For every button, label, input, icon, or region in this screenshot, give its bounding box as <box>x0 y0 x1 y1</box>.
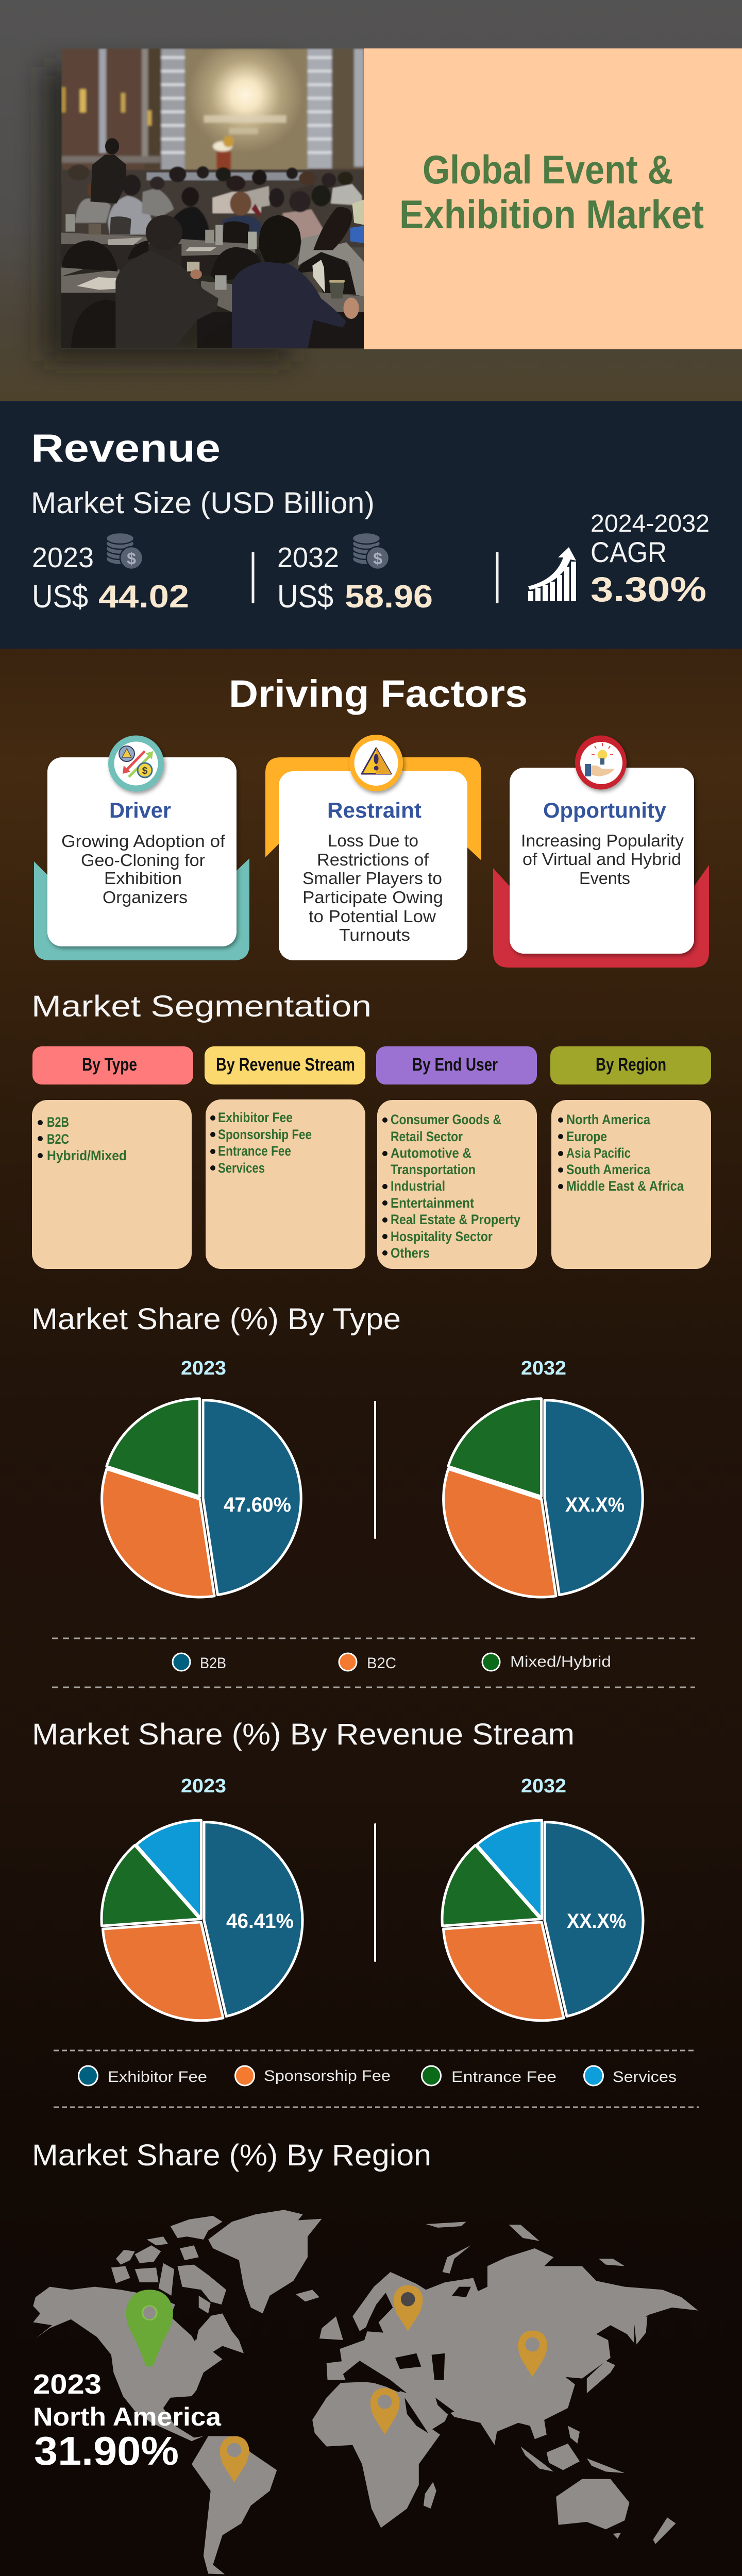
list: region: Asia Pacific <box>566 1145 631 1161</box>
divider <box>251 552 255 603</box>
stat: 2023 revenue <box>32 541 189 615</box>
card title: Restraint <box>327 798 421 822</box>
list: end user: Real Estate & Property <box>391 1212 520 1227</box>
stat: cagr: 3.30% <box>591 570 706 609</box>
heading: driving factors: Driving Factors <box>229 672 528 715</box>
title: Exhibition Market <box>399 192 704 237</box>
list: end user: Industrial <box>391 1178 445 1194</box>
pie chart: revenue stream 2032 <box>442 1820 643 2021</box>
pie label 2032: XX.X% <box>567 1910 626 1933</box>
stat: 2032 revenue <box>277 541 433 615</box>
pie label 2023: 46.41% <box>226 1910 294 1933</box>
card text: of Virtual and Hybrid <box>522 850 681 869</box>
legend: type: Mixed/Hybrid <box>510 1653 611 1670</box>
heading: market share by revenue stream: Market Share (%) By Revenue Stream <box>32 1718 575 1751</box>
pin: middle east and africa <box>370 2388 399 2435</box>
pin: north america <box>126 2290 173 2367</box>
card text: Turnouts <box>339 925 410 944</box>
year label 2032: 2032 <box>521 1358 566 1379</box>
list: region: South America <box>566 1162 651 1177</box>
card text <box>302 831 443 944</box>
legend: type: B2C <box>367 1655 396 1672</box>
card title: Opportunity <box>543 798 667 822</box>
list: region: Middle East & Africa <box>566 1178 684 1194</box>
card title: Driver <box>109 798 171 822</box>
pin: europe <box>394 2285 423 2331</box>
card text: Loss Due to <box>328 831 418 850</box>
stat: 2023 revenue: US$ <box>32 579 88 615</box>
pie label 2032: XX.X% <box>565 1494 625 1516</box>
title: Global Event & <box>423 147 673 192</box>
callout: north america share <box>33 2369 222 2473</box>
callout: north america share: 31.90% <box>34 2428 179 2473</box>
segment: by end user <box>376 1046 537 1269</box>
list: revenue stream: Sponsorship Fee <box>218 1127 312 1142</box>
icon: coins 2032: $ <box>373 549 382 568</box>
hero photo: conference audience <box>61 48 365 349</box>
icon: growth chart <box>528 547 576 601</box>
icon: opportunity badge <box>575 736 627 789</box>
hero shadow <box>44 67 291 361</box>
segment: by revenue stream <box>205 1046 365 1269</box>
icon: coins 2023: $ <box>127 549 136 568</box>
list: region: Europe <box>566 1129 607 1144</box>
icon: coins 2023 <box>106 533 143 569</box>
list: end user: Transportation <box>391 1162 476 1177</box>
photo: distant audience <box>61 165 365 247</box>
segment: by revenue stream: By Revenue Stream <box>216 1055 355 1075</box>
heading: market share by type: Market Share (%) By Type <box>31 1302 401 1336</box>
legend: revenue stream: Entrance Fee <box>451 2069 556 2086</box>
list: end user <box>382 1112 520 1261</box>
year label 2032: 2032 <box>521 1775 566 1797</box>
year label 2023: 2023 <box>181 1358 226 1379</box>
card text <box>61 832 226 907</box>
stat: 2023 revenue: 2023 <box>32 541 94 573</box>
photo: light strip at bottom <box>61 348 364 349</box>
pin: south america <box>220 2436 249 2483</box>
map: inland seas <box>180 2287 471 2433</box>
card text: Growing Adoption of <box>61 832 226 851</box>
list: type: B2C <box>47 1131 69 1147</box>
legend: revenue stream: Services <box>613 2069 677 2086</box>
divider <box>374 1401 376 1539</box>
stat: 2023 revenue: 44.02 <box>98 579 189 615</box>
list: end user: Others <box>391 1245 430 1261</box>
subheading: market size: Market Size (USD Billion) <box>31 486 375 520</box>
card text: Restrictions of <box>317 850 429 869</box>
card text: Increasing Popularity <box>521 831 684 850</box>
legend: type <box>173 1653 611 1672</box>
list: region: North America <box>566 1112 651 1127</box>
pie chart: type 2032 <box>444 1399 643 1597</box>
card text: Smaller Players to <box>302 869 442 888</box>
segment: by region <box>550 1046 711 1269</box>
card text: to Potential Low <box>309 907 436 926</box>
card text: Events <box>579 869 630 888</box>
photo: standing man <box>90 155 126 204</box>
revenue panel <box>0 401 742 649</box>
segment: by region: By Region <box>596 1055 666 1075</box>
photo: tables <box>61 232 364 349</box>
legend: type: B2B <box>200 1655 226 1672</box>
photo: foreground attendees <box>65 200 364 349</box>
card text: Geo-Cloning for <box>81 851 205 870</box>
list: revenue stream: Entrance Fee <box>218 1143 291 1159</box>
top background <box>0 0 742 402</box>
card text: Participate Owing <box>302 888 443 907</box>
stat: cagr: 2024-2032 <box>591 510 710 537</box>
year label 2023: 2023 <box>181 1775 226 1797</box>
card: opportunity <box>493 736 709 968</box>
stat: cagr: CAGR <box>591 536 667 568</box>
card text: Organizers <box>103 888 188 907</box>
divider <box>496 552 499 603</box>
list: revenue stream <box>210 1110 312 1176</box>
legend: revenue stream: Exhibitor Fee <box>108 2069 207 2086</box>
list: end user: Retail Sector <box>391 1129 463 1144</box>
segment: by end user: By End User <box>412 1055 498 1075</box>
photo: chairs <box>61 216 357 349</box>
list: type <box>38 1114 127 1163</box>
icon: coins 2032 <box>352 533 389 569</box>
list: revenue stream: Services <box>218 1160 265 1176</box>
stat: cagr <box>591 510 710 609</box>
list: end user: Entertainment <box>391 1195 474 1211</box>
pie chart: type 2023 <box>102 1399 301 1597</box>
pie chart: revenue stream 2023 <box>102 1820 302 2021</box>
stat: 2032 revenue: 2032 <box>277 541 339 573</box>
card: driver <box>34 736 249 960</box>
icon: driver badge <box>108 736 164 791</box>
heading: market share by region: Market Share (%) By Region <box>32 2139 431 2172</box>
segment: by type <box>32 1046 193 1269</box>
legend: revenue stream: Sponsorship Fee <box>264 2067 391 2084</box>
pie label 2023: 47.60% <box>224 1494 291 1516</box>
callout: north america share: North America <box>33 2402 222 2431</box>
divider <box>374 1823 376 1962</box>
callout: north america share: 2023 <box>33 2369 102 2400</box>
list: type: B2B <box>47 1114 69 1130</box>
pin: asia pacific <box>518 2331 547 2377</box>
section background <box>0 648 742 2576</box>
list: region <box>558 1112 684 1194</box>
list: end user: Consumer Goods & <box>391 1112 501 1127</box>
list: type: Hybrid/Mixed <box>47 1148 127 1163</box>
world map <box>33 2210 698 2574</box>
list: revenue stream: Exhibitor Fee <box>218 1110 293 1125</box>
stat: 2032 revenue: US$ <box>277 579 333 615</box>
map: continents <box>33 2210 698 2574</box>
title <box>399 147 704 237</box>
legend: revenue stream <box>78 2066 677 2086</box>
list: end user: Hospitality Sector <box>391 1229 493 1244</box>
heading: revenue: Revenue <box>31 427 221 470</box>
card: restraint <box>265 735 481 960</box>
card text: Exhibition <box>104 869 182 888</box>
stat: 2032 revenue: 58.96 <box>345 579 433 615</box>
segment: by type: By Type <box>82 1055 137 1075</box>
card text <box>521 831 684 888</box>
title panel <box>364 48 742 349</box>
icon: driver badge: $ <box>142 766 148 776</box>
photo background: stage and walls <box>61 48 365 184</box>
list: end user: Automotive & <box>391 1145 471 1161</box>
icon: warning badge <box>349 735 403 791</box>
heading: market segmentation: Market Segmentation <box>31 990 372 1023</box>
